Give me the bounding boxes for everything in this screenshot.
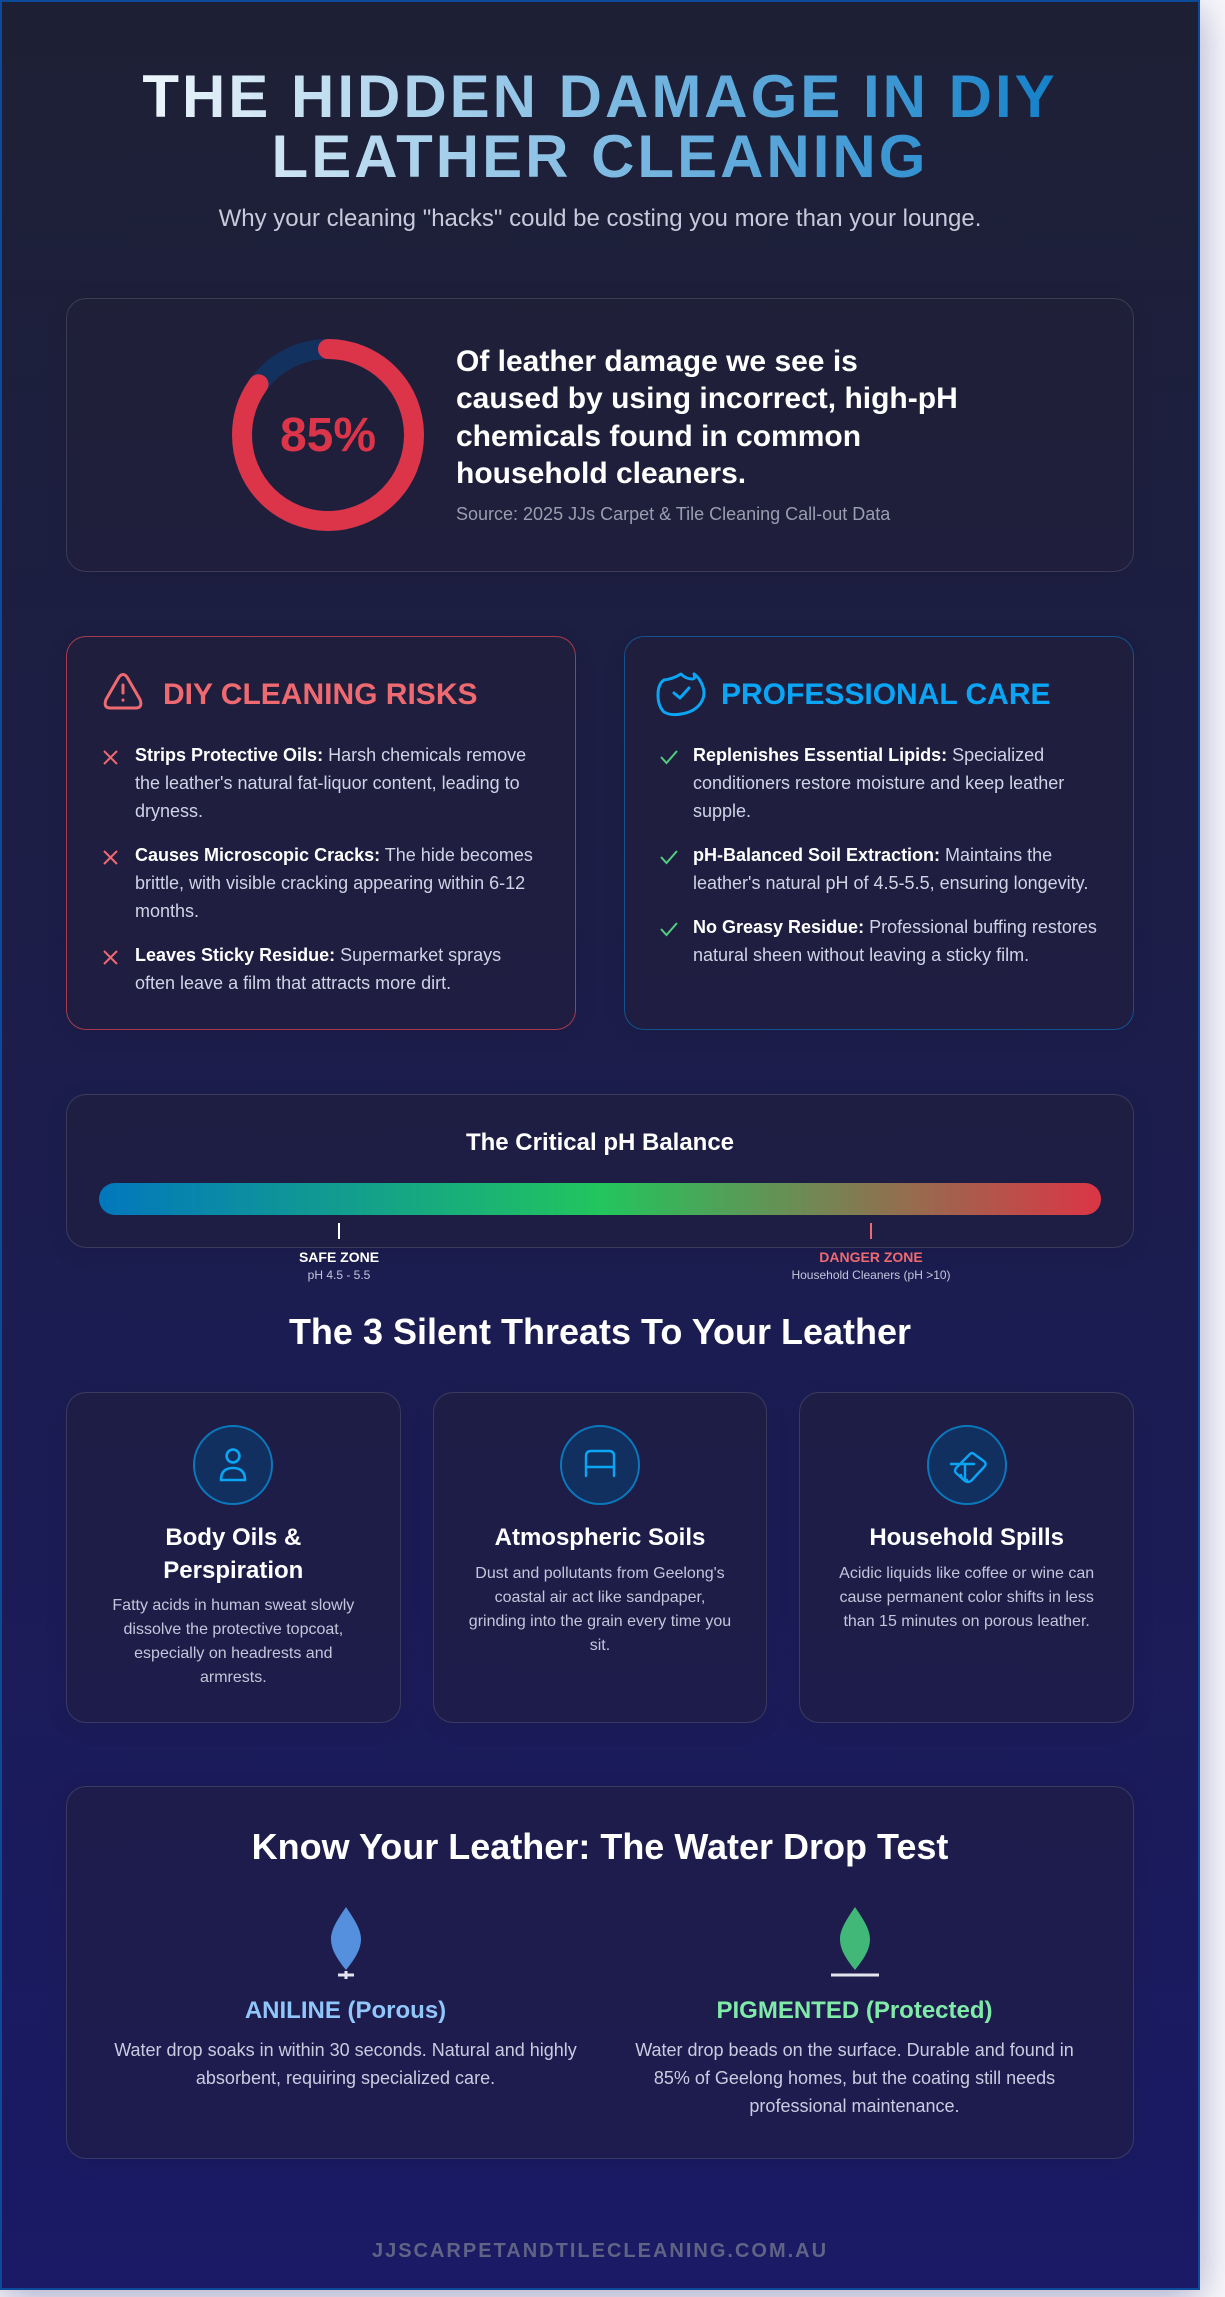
icon: pigmented water drop: [831, 1907, 879, 1976]
care item 3: [693, 917, 1097, 965]
safe zone range: pH 4.5 - 5.5: [308, 1268, 370, 1282]
panel: professional care: [624, 636, 1134, 1030]
risk item 1: Strips Protective Oils: Harsh chemicals remove: [135, 745, 526, 765]
icon glyph: tilted container: [950, 1452, 987, 1484]
threat title: household spills: Household Spills: [869, 1524, 1064, 1551]
heading: professional care: PROFESSIONAL CARE: [721, 678, 1050, 710]
title: LEATHER CLEANING: [272, 123, 928, 190]
threat text: body oils: dissolve the protective topcoat,: [123, 1621, 343, 1638]
icon: atmospheric circle: [560, 1425, 640, 1505]
heading: DIY cleaning risks: DIY CLEANING RISKS: [163, 678, 478, 710]
threat text: household spills: Acidic liquids like coffee or wine can: [839, 1565, 1094, 1582]
pigmented text: [635, 2040, 1074, 2116]
care item 1: Replenishes Essential Lipids: Specialized: [693, 745, 1044, 765]
title: THE HIDDEN DAMAGE IN DIY: [142, 63, 1058, 130]
icon: check 2: [660, 850, 678, 864]
threat text: body oils: [112, 1597, 354, 1686]
panel: DIY cleaning risks: [66, 636, 576, 1030]
care item 1: supple.: [693, 801, 751, 821]
statistic source: Source: 2025 JJs Carpet & Tile Cleaning Call-out Data: [456, 504, 890, 524]
donut chart: 85 percent: [232, 339, 424, 531]
threat title: body oils: [163, 1524, 303, 1584]
icon glyph: person: [220, 1448, 246, 1482]
pigmented text: Water drop beads on the surface. Durable and found in: [635, 2040, 1074, 2060]
risk item 2: Causes Microscopic Cracks: The hide becomes: [135, 845, 533, 865]
threat title: body oils: Body Oils &: [165, 1524, 301, 1551]
care item 1: conditioners restore moisture and keep leather: [693, 773, 1064, 793]
subtitle: Why your cleaning "hacks" could be costing you more than your lounge.: [219, 205, 981, 232]
care item 2: [693, 845, 1088, 893]
care item 2: pH-Balanced Soil Extraction: Maintains the: [693, 845, 1052, 865]
threat text: body oils: especially on headrests and: [134, 1645, 332, 1662]
heading: water drop test: Know Your Leather: The Water Drop Test: [252, 1826, 948, 1867]
donut value: 85%: [280, 409, 376, 462]
statistic statement: [456, 344, 958, 490]
title: [66, 67, 1134, 187]
panel: 85% statistic: [66, 298, 1134, 572]
aniline text: Water drop soaks in within 30 seconds. Natural and highly: [114, 2040, 577, 2060]
icon: spills circle: [927, 1425, 1007, 1505]
icon: aniline water drop: [331, 1907, 361, 1979]
footer website: JJSCARPETANDTILECLEANING.COM.AU: [372, 2240, 828, 2262]
care item 3: No Greasy Residue: Professional buffing restores: [693, 917, 1097, 937]
safe zone label: SAFE ZONE: [299, 1248, 379, 1264]
threat text: body oils: armrests.: [200, 1669, 267, 1686]
icon: shield check: [656, 672, 706, 716]
threat text: body oils: Fatty acids in human sweat slowly: [112, 1597, 354, 1614]
danger zone range: Household Cleaners (pH >10): [791, 1268, 951, 1282]
icon: cross 1: [103, 750, 118, 765]
statistic statement: household cleaners.: [456, 457, 746, 490]
panel: pH balance: [66, 1094, 1134, 1248]
icon: cross 3: [103, 950, 118, 965]
aniline label: ANILINE (Porous): [245, 1997, 446, 2024]
panel: atmospheric soils: [433, 1392, 767, 1722]
statistic statement: chemicals found in common: [456, 420, 861, 452]
heading: three threats: The 3 Silent Threats To Your Leather: [289, 1311, 911, 1352]
statistic statement: Of leather damage we see is: [456, 344, 858, 378]
threat text: atmospheric soils: sit.: [590, 1637, 610, 1654]
risk item 2: months.: [135, 901, 199, 921]
threat text: atmospheric soils: coastal air act like sandpaper,: [495, 1589, 705, 1606]
care item 2: leather's natural pH of 4.5-5.5, ensuring longevity.: [693, 873, 1088, 893]
threat title: atmospheric soils: Atmospheric Soils: [495, 1524, 705, 1551]
threat text: household spills: than 15 minutes on porous leather.: [843, 1613, 1090, 1630]
pigmented label: PIGMENTED (Protected): [716, 1997, 993, 2024]
pigmented text: 85% of Geelong homes, but the coating still needs: [654, 2068, 1055, 2088]
risk item 3: Leaves Sticky Residue: Supermarket sprays: [135, 945, 501, 965]
panel: body oils: [66, 1392, 401, 1722]
risk item 2: [135, 845, 533, 921]
threat text: household spills: [839, 1565, 1094, 1630]
danger zone marker: [870, 1223, 872, 1239]
aniline text: absorbent, requiring specialized care.: [196, 2068, 495, 2088]
risk item 3: [135, 945, 501, 993]
pigmented text: professional maintenance.: [749, 2096, 960, 2116]
care item 3: natural sheen without leaving a sticky film.: [693, 945, 1029, 965]
icon: warning triangle: [104, 673, 142, 710]
heading: critical pH balance: The Critical pH Balance: [466, 1129, 734, 1156]
aniline text: [114, 2040, 577, 2088]
risk item 1: the leather's natural fat-liquor content, leading to: [135, 773, 520, 793]
threat text: household spills: cause permanent color shifts in less: [839, 1589, 1094, 1606]
threat title: body oils: Perspiration: [163, 1556, 303, 1584]
threat text: atmospheric soils: [469, 1565, 731, 1654]
icon: person: [193, 1425, 273, 1505]
icon glyph: bench: [584, 1450, 616, 1478]
panel: household spills: [799, 1392, 1134, 1722]
safe zone marker: [338, 1223, 340, 1239]
pH gradient bar: [99, 1183, 1101, 1215]
risk item 1: [135, 745, 526, 821]
risk item 3: often leave a film that attracts more dirt.: [135, 973, 451, 993]
care item 1: [693, 745, 1064, 821]
threat text: atmospheric soils: Dust and pollutants from Geelong's: [475, 1565, 725, 1582]
panel: water drop test: [66, 1786, 1134, 2159]
icon: check 1: [660, 750, 678, 764]
statistic statement: caused by using incorrect, high-pH: [456, 382, 958, 415]
threat text: atmospheric soils: grinding into the grain every time you: [469, 1613, 731, 1630]
icon: check 3: [660, 922, 678, 936]
risk item 1: dryness.: [135, 801, 203, 821]
risk item 2: brittle, with visible cracking appearing within 6-12: [135, 873, 525, 893]
danger zone label: DANGER ZONE: [819, 1248, 923, 1264]
icon: cross 2: [103, 850, 118, 865]
